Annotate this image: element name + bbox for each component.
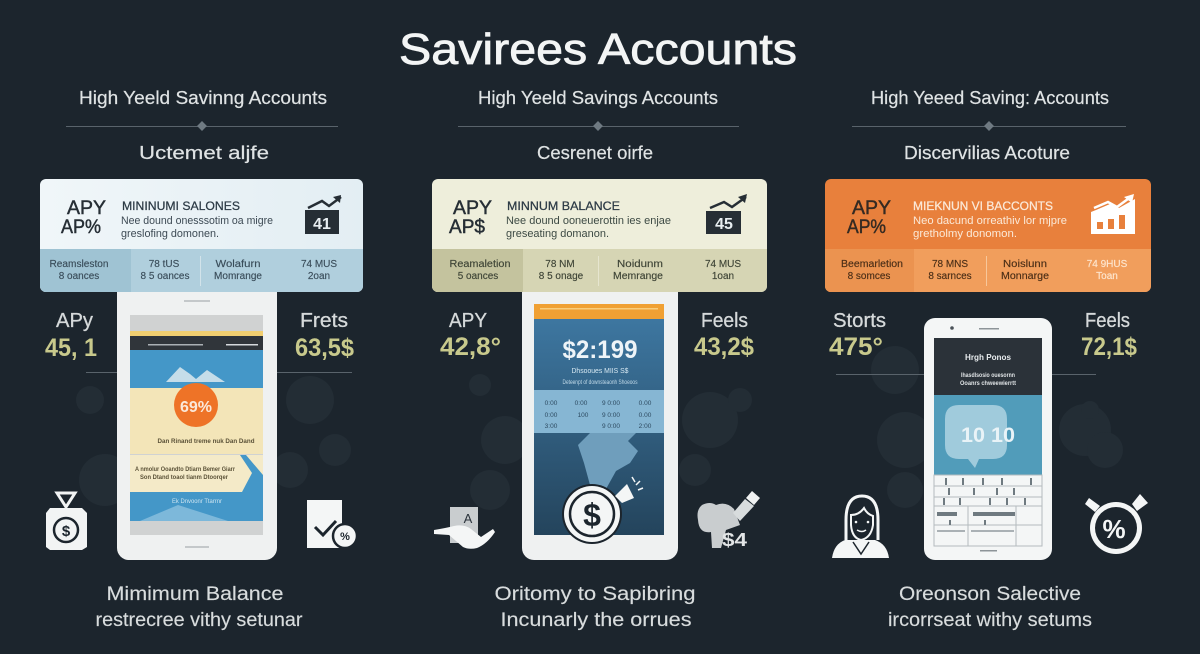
icon: stopwatch percent bbox=[1085, 494, 1148, 554]
panel: card 3: Noislunn bbox=[1003, 259, 1047, 270]
phone 3 bbox=[924, 318, 1052, 560]
panel: card 2: MINNUM BALANCE bbox=[507, 199, 620, 213]
panel: card 1: AP% bbox=[61, 217, 101, 238]
icon: cloud and flashlight $4: $4 bbox=[722, 530, 747, 550]
phone 2: Dhsooues MIIS S$ bbox=[572, 368, 629, 375]
panel: card 2: 8 5 onage bbox=[539, 271, 584, 282]
column 2 heading: Cesrenet oirfe bbox=[537, 143, 653, 163]
column 3 heading: High Yeeed Saving: Accounts bbox=[871, 88, 1109, 108]
icon: cloud and flashlight $4 bbox=[698, 491, 760, 550]
icon: dollar coin with flashlight bbox=[562, 477, 643, 544]
column 2 heading bbox=[458, 88, 739, 163]
icon: chart badge 45: 45 bbox=[715, 216, 733, 233]
side stats 1: 63,5$ bbox=[295, 334, 354, 362]
side stats 2 bbox=[440, 310, 754, 361]
phone 3: Ooanrs chweewierrtt bbox=[960, 381, 1016, 387]
panel: card 1: APY bbox=[67, 198, 106, 219]
panel: card 2: Nee dound ooneuerottin ies enjae bbox=[506, 215, 671, 227]
speech bubble: 10 10 bbox=[945, 405, 1015, 468]
panel: card 1: 2oan bbox=[308, 271, 330, 282]
title: Savirees Accounts bbox=[399, 25, 797, 74]
phone 2: Deteenpt of downsteaonh Shoeoos bbox=[562, 380, 638, 386]
panel: card 2 bbox=[432, 179, 767, 292]
panel: card 1: Reamsleston bbox=[50, 259, 108, 270]
phone 2: 9 0:00 bbox=[602, 400, 620, 407]
icon: check percent bbox=[307, 500, 357, 548]
panel: card 2: greseating domanon. bbox=[506, 228, 609, 240]
phone 2: 100 bbox=[578, 412, 589, 419]
side stats 3: 72,1$ bbox=[1081, 333, 1137, 361]
column 1 heading bbox=[66, 88, 338, 163]
panel: card 2: 78 NM bbox=[545, 259, 575, 270]
phone 2: 0:00 bbox=[545, 400, 558, 407]
panel: card 1: greslofing domonen. bbox=[121, 228, 219, 240]
panel: card 1: 78 tUS bbox=[149, 259, 180, 270]
side stats 1 bbox=[45, 310, 354, 362]
side stats 1: Frets bbox=[300, 310, 348, 332]
phone 2: 0:00 bbox=[545, 412, 558, 419]
panel: card 3: 78 MNS bbox=[932, 259, 968, 270]
side stats 2: 43,2$ bbox=[694, 333, 754, 361]
panel: card 3: 8 sarnces bbox=[928, 271, 972, 282]
bottom caption 3 bbox=[888, 584, 1092, 631]
side stats 3: 475° bbox=[829, 333, 883, 361]
panel: card 3: Beemarletion bbox=[841, 259, 903, 270]
icon: money bag: $ bbox=[62, 523, 71, 540]
bottom caption 2: Incunarly the orrues bbox=[500, 610, 692, 631]
panel: card 3: Toan bbox=[1096, 271, 1118, 282]
phone 1: Ek Dnvoonr Ttarrnr bbox=[172, 499, 222, 505]
icon: hand holding card: A bbox=[464, 511, 473, 526]
column 2 heading: High Yeeld Savings Accounts bbox=[478, 88, 718, 108]
badge: 69% bbox=[174, 383, 218, 427]
column 1 heading: High Yeeld Savinng Accounts bbox=[79, 88, 327, 108]
bottom caption 1 bbox=[96, 584, 303, 631]
icon: chart badge 45 bbox=[706, 194, 747, 234]
icon: chart badge 41 bbox=[305, 195, 341, 234]
phone 3: Ihasdlsosio ouesornn bbox=[961, 373, 1015, 379]
phone 1: Dan Rinand treme nuk Dan Dand bbox=[158, 438, 255, 445]
panel: card 2: Reamaletion bbox=[450, 259, 510, 270]
panel: card 3: 8 somces bbox=[848, 271, 890, 282]
phone 2: 9 0:00 bbox=[602, 423, 620, 430]
column 1 heading: Uctemet aljfe bbox=[139, 143, 269, 163]
column 3 heading bbox=[852, 88, 1126, 163]
panel: card 1: 8 oances bbox=[59, 271, 99, 282]
panel: card 3 bbox=[825, 179, 1151, 292]
phone 2: 0.00 bbox=[639, 412, 652, 419]
panel: card 1: Wolafurn bbox=[216, 259, 260, 270]
icon: hand holding card bbox=[434, 507, 495, 549]
panel: card 1: MININUMI SALONES bbox=[122, 199, 240, 213]
icon: dollar coin with flashlight: $ bbox=[583, 497, 601, 533]
side stats 1: 45, 1 bbox=[45, 334, 97, 362]
phone 2 bbox=[522, 292, 678, 560]
panel: card 3: Monnarge bbox=[1001, 271, 1049, 282]
panel: card 3: MIEKNUN VI BACCONTS bbox=[913, 199, 1053, 213]
panel: card 2: 5 oances bbox=[458, 271, 498, 282]
icon: money bag bbox=[46, 493, 87, 550]
side dividers bbox=[86, 372, 1096, 375]
panel: card 2: Noidunm bbox=[617, 259, 663, 270]
panel: card 3: APY bbox=[852, 198, 891, 219]
bottom caption 3: Oreonson Salective bbox=[899, 584, 1081, 605]
phone 2: 0:00 bbox=[575, 400, 588, 407]
side stats 2: Feels bbox=[701, 310, 748, 332]
speech bubble: 10 10: 10 10 bbox=[961, 424, 1015, 447]
panel: card 1: 74 MUS bbox=[301, 259, 337, 270]
column 3 heading: Discervilias Acoture bbox=[904, 143, 1070, 163]
panel: card 1 bbox=[40, 179, 363, 292]
bottom caption 2: Oritomy to Sapibring bbox=[494, 584, 696, 605]
panel: card 3: 74 9HUS bbox=[1087, 259, 1128, 270]
phone 2: 3:00 bbox=[545, 423, 558, 430]
bottom caption 3: ircorrseat withy setums bbox=[888, 610, 1092, 631]
icon: stopwatch percent: % bbox=[1102, 514, 1126, 544]
phone 2: 9 0:00 bbox=[602, 412, 620, 419]
panel: card 2: 74 MUS bbox=[705, 259, 741, 270]
panel: card 3: Neo dacund orreathiv lor mjpre bbox=[913, 215, 1067, 227]
side stats 3: Storts bbox=[833, 310, 886, 332]
panel: card 3: AP% bbox=[847, 217, 886, 238]
panel: card 3: gretholmy donomon. bbox=[913, 228, 1017, 240]
phone 2: 0.00 bbox=[639, 400, 652, 407]
bottom caption 1: restrecree vithy setunar bbox=[96, 610, 303, 631]
icon: check percent: % bbox=[340, 531, 350, 543]
icon: person bbox=[832, 496, 889, 558]
phone 3: Hrgh Ponos bbox=[965, 353, 1012, 362]
phone 1 bbox=[117, 292, 277, 560]
side stats 3 bbox=[829, 310, 1137, 361]
phone 1: Son Dtand toaol tianm Dtoorqer bbox=[140, 475, 229, 481]
side stats 2: APY bbox=[449, 310, 487, 332]
panel: card 1: 8 5 oances bbox=[141, 271, 189, 282]
panel: card 2: APY bbox=[453, 198, 492, 219]
side stats 2: 42,8° bbox=[440, 333, 501, 361]
bottom caption 2 bbox=[494, 584, 696, 631]
phone 2: 2:00 bbox=[639, 423, 652, 430]
side stats 3: Feels bbox=[1085, 310, 1130, 332]
panel: card 1: Momrange bbox=[214, 271, 262, 282]
panel: card 2: 1oan bbox=[712, 271, 734, 282]
side stats 1: APy bbox=[56, 310, 93, 332]
icon: bar chart bbox=[1091, 194, 1135, 234]
panel: card 2: AP$ bbox=[449, 217, 485, 238]
badge: 69%: 69% bbox=[180, 399, 212, 416]
phone 1: A nmolur Ooandto Dtiarn Bemer Giarr bbox=[135, 467, 236, 473]
icon: chart badge 41: 41 bbox=[313, 216, 331, 233]
panel: card 1: Nee dound onesssotim oa migre bbox=[121, 215, 273, 227]
panel: card 2: Memrange bbox=[613, 271, 663, 282]
phone 2: $2:199 bbox=[562, 336, 638, 364]
bottom caption 1: Mimimum Balance bbox=[106, 584, 284, 605]
